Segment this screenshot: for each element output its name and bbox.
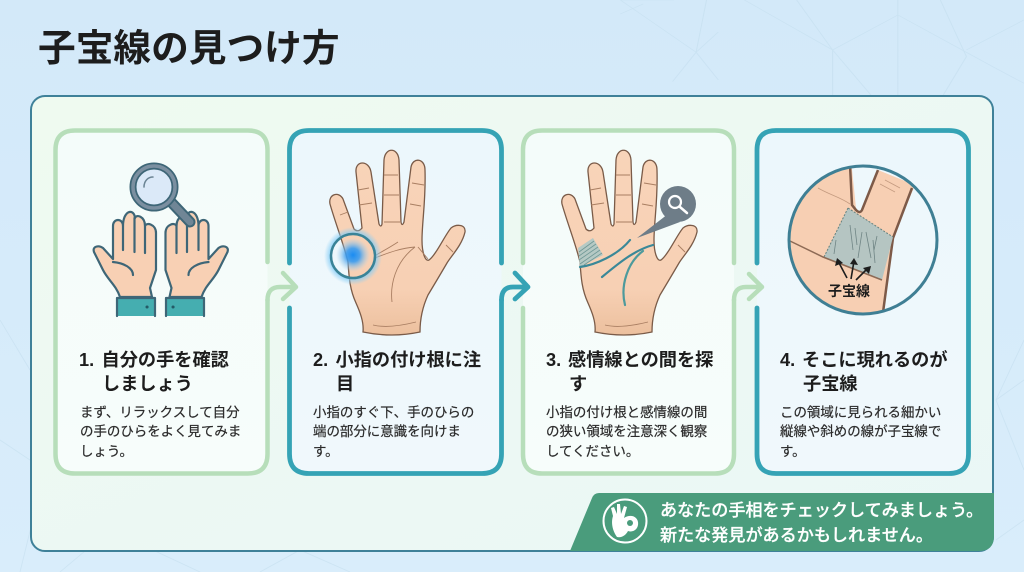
left hand creases xyxy=(113,218,145,275)
hand xyxy=(330,150,465,335)
arrow: step 1 to 2 xyxy=(268,273,296,300)
heading 4: 4. xyxy=(780,350,795,370)
callout text: 新たな発見があるかもしれません。 xyxy=(660,525,933,545)
palm creases xyxy=(818,180,900,204)
heading 1: 自分の手を確認 xyxy=(102,350,229,370)
right cuff xyxy=(166,298,204,316)
fine lines xyxy=(834,225,877,263)
body 3: 小指の付け根と感情線の間 xyxy=(546,404,707,420)
left hand xyxy=(94,212,156,297)
shaded region xyxy=(824,208,893,280)
body 4: す。 xyxy=(780,444,806,459)
left cuff xyxy=(117,298,155,316)
callout banner xyxy=(570,493,994,551)
heading 2: 小指の付け根に注 xyxy=(336,349,481,370)
body 3: してください。 xyxy=(546,444,639,459)
body 4: 縦線や斜めの線が子宝線で xyxy=(780,424,941,439)
heading 3: 3. xyxy=(546,350,561,370)
life line xyxy=(624,251,643,305)
body 2: 小指のすぐ下、手のひらの xyxy=(313,405,474,420)
body 2: す。 xyxy=(313,444,339,459)
card 2 border xyxy=(290,130,502,474)
body 1: しょう。 xyxy=(80,444,133,459)
body 1: まず、リラックスして自分 xyxy=(80,405,240,420)
icon: palm with marked lines xyxy=(562,150,697,335)
card 3 xyxy=(523,130,734,474)
body 2: 端の部分に意識を向けま xyxy=(313,424,461,439)
body 1: の手のひらをよく見てみま xyxy=(80,424,241,439)
icon: magnified palm detail xyxy=(788,164,938,316)
heading 1: しましょう xyxy=(102,374,193,394)
hatched area xyxy=(578,238,603,267)
card 2 xyxy=(290,130,502,474)
heading 3: す xyxy=(569,374,587,394)
heart line xyxy=(580,240,630,267)
heading 1: 1. xyxy=(79,350,94,370)
icon: OK hand xyxy=(604,500,646,542)
heading 4: 子宝線 xyxy=(803,374,858,394)
arrow: step 2 to 3 xyxy=(502,273,528,300)
callout text: あなたの手相をチェックしてみましょう。 xyxy=(660,501,983,520)
card 3 border xyxy=(523,130,734,474)
head line xyxy=(602,245,653,277)
right hand xyxy=(166,212,228,297)
heading 2: 2. xyxy=(313,350,328,370)
heading 2: 目 xyxy=(336,374,354,394)
magnifier xyxy=(133,166,190,222)
cuff buttons xyxy=(147,306,173,308)
heading 4: そこに現れるのが xyxy=(802,349,948,370)
label: 子宝線: 子宝線 xyxy=(828,283,870,299)
hand xyxy=(562,150,697,335)
title: 子宝線の見つけ方 xyxy=(38,27,340,69)
main panel xyxy=(31,96,993,551)
card 1 xyxy=(56,130,268,474)
body 3: の狭い領域を注意深く観察 xyxy=(546,424,707,439)
search bubble xyxy=(637,186,696,238)
body 4: この領域に見られる細かい xyxy=(780,405,941,420)
icon: two hands with magnifier xyxy=(94,166,228,316)
heart line xyxy=(790,241,882,280)
finger creases xyxy=(590,175,685,326)
card 1 border xyxy=(56,130,268,474)
card 4 border xyxy=(757,130,968,474)
arrows to lines xyxy=(835,258,871,280)
glowing highlight xyxy=(324,227,382,285)
right hand creases xyxy=(176,218,208,275)
heading 3: 感情線との間を探 xyxy=(568,349,713,370)
palm lines xyxy=(340,175,453,326)
arrow: step 3 to 4 xyxy=(734,274,762,300)
icon: palm with highlighted spot xyxy=(324,150,465,335)
skin xyxy=(790,168,914,312)
card 4 xyxy=(757,130,968,474)
